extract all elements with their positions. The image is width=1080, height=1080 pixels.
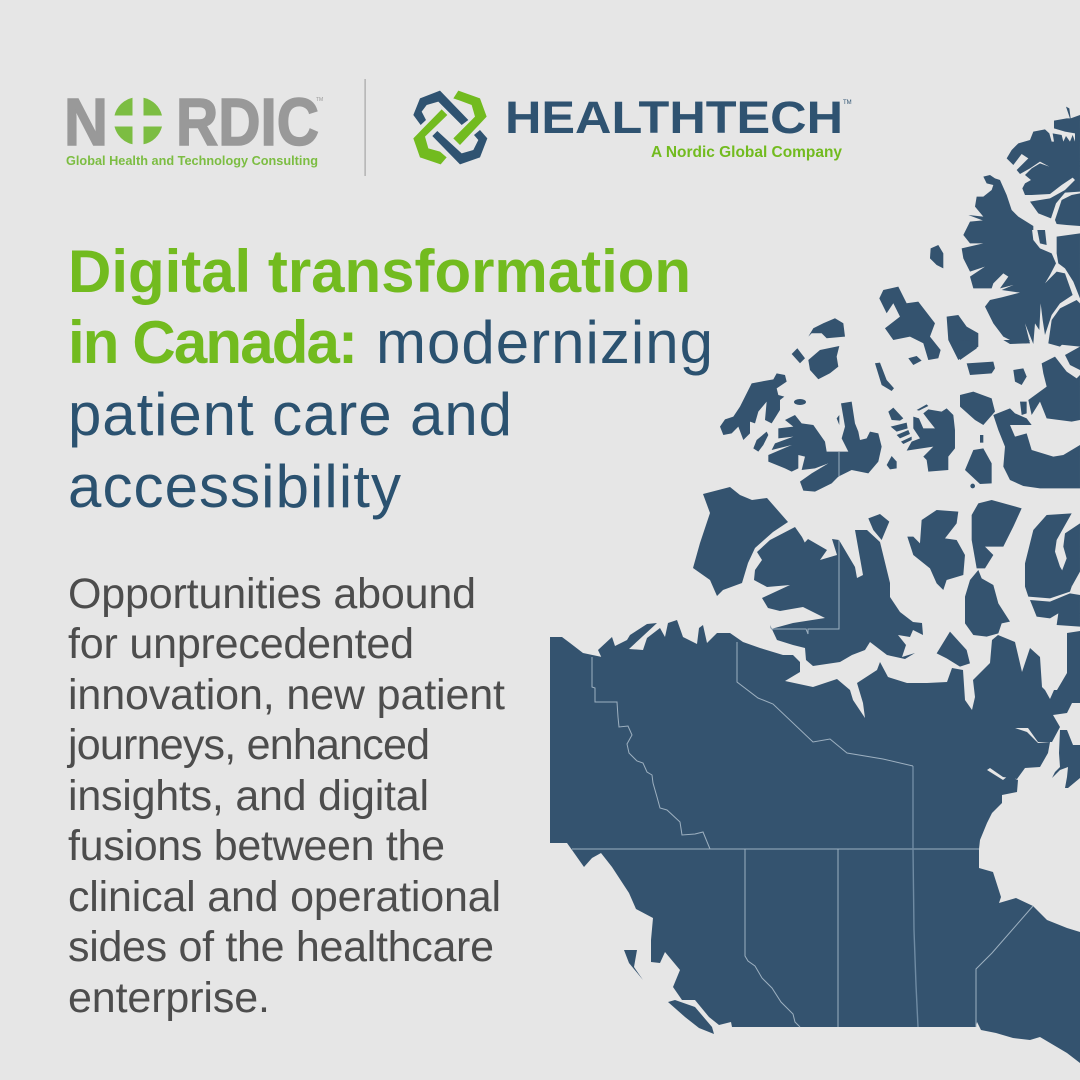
map of Canada <box>550 107 1080 1063</box>
body text: enterprise. <box>68 974 270 1022</box>
map: high arctic islands west <box>792 245 978 391</box>
Healthtech tagline: A Nordic Global Company <box>651 144 842 161</box>
map: provincial borders <box>572 452 1033 1027</box>
Nordic tagline: Global Health and Technology Consulting <box>66 153 318 168</box>
title: patient care and <box>68 381 512 448</box>
map: Boothia and Baffin islands <box>965 500 1080 637</box>
Nordic wordmark: RDIC <box>176 85 319 160</box>
map: Banks Island <box>693 487 788 596</box>
Nordic logo <box>64 85 323 168</box>
body text: insights, and digital <box>68 772 429 820</box>
title: modernizing <box>376 309 713 376</box>
map: Melville and neighbouring islands <box>720 373 955 492</box>
Healthtech trademark: TM <box>843 100 852 106</box>
map: Victoria Island <box>754 527 923 666</box>
body text: clinical and operational <box>68 873 501 921</box>
Nordic wordmark: N <box>64 85 108 160</box>
title: in Canada: <box>68 309 358 376</box>
map: central arctic islands <box>868 510 970 667</box>
Healthtech logo <box>413 91 852 164</box>
map: southern Ellesmere and Axel Heiberg <box>962 220 1080 347</box>
map: northern Ellesmere Island <box>968 107 1080 230</box>
title: accessibility <box>68 453 401 520</box>
body text: sides of the healthcare <box>68 923 494 971</box>
icon: Nordic green cross circle <box>114 98 162 144</box>
Nordic wordmark <box>64 85 319 160</box>
map: Haida Gwaii <box>624 950 643 980</box>
body text: innovation, new patient <box>68 671 505 719</box>
title: Digital transformation <box>68 238 691 305</box>
title <box>68 238 713 520</box>
icon: Healthtech interlocking mark <box>413 91 487 164</box>
body text <box>66 570 505 1022</box>
body text: fusions between the <box>68 822 445 870</box>
logo divider <box>364 79 366 176</box>
map: east coast island <box>1052 730 1080 788</box>
Healthtech wordmark: HEALTHTECH <box>505 92 843 143</box>
body text: journeys, enhanced <box>66 721 430 769</box>
body text: Opportunities abound <box>68 570 476 618</box>
body text: for unprecedented <box>68 620 414 668</box>
map: Devon and north Baffin area <box>960 340 1080 488</box>
Nordic trademark: TM <box>316 97 323 103</box>
map: mainland <box>550 620 1080 1063</box>
map: Vancouver Island <box>668 1000 714 1034</box>
